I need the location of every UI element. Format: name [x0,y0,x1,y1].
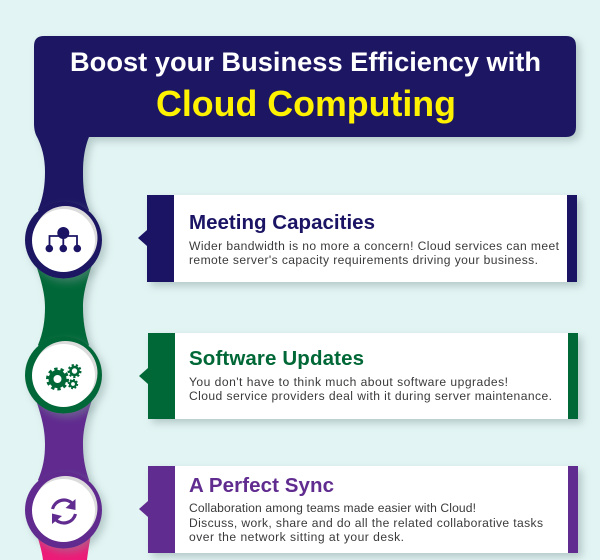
step 3: card [139,466,578,553]
timeline connector: purple segment [36,400,92,495]
icon: sync arrows [52,499,76,524]
step 2: card: Software Updates [189,347,364,370]
step 1: card: Wider bandwidth is no more a concern! Cloud services can meet [189,239,560,253]
step 3: card: A Perfect Sync [189,474,334,497]
step 3: card: Collaboration among teams made easier with Cloud! [189,501,476,515]
title: Boost your Business Efficiency with [70,47,541,77]
icon: gears [48,365,80,389]
title [70,47,541,124]
step 2: card: You don't have to think much about software upgrades! [189,375,508,389]
step 1: card [138,195,577,282]
step 1: card: Meeting Capacities [189,211,375,234]
step 3: card: over the network sitting at your desk. [189,530,404,544]
timeline connector: green segment [36,265,92,360]
step 2: card [139,333,578,419]
timeline connector: pink segment [37,535,91,560]
icon: hierarchy [46,227,81,252]
title: Cloud Computing [156,83,456,124]
step 3: card: Discuss, work, share and do all the related collaborative tasks [189,516,543,530]
step 1: card: remote server's capacity requirements driving your business. [189,253,538,267]
header banner with stem [34,36,576,225]
step 2: card: Cloud service providers deal with it during server maintenance. [189,389,552,403]
step 2: icon node [25,336,102,414]
step 1: icon node [25,202,102,278]
step 3: icon node [25,472,102,548]
